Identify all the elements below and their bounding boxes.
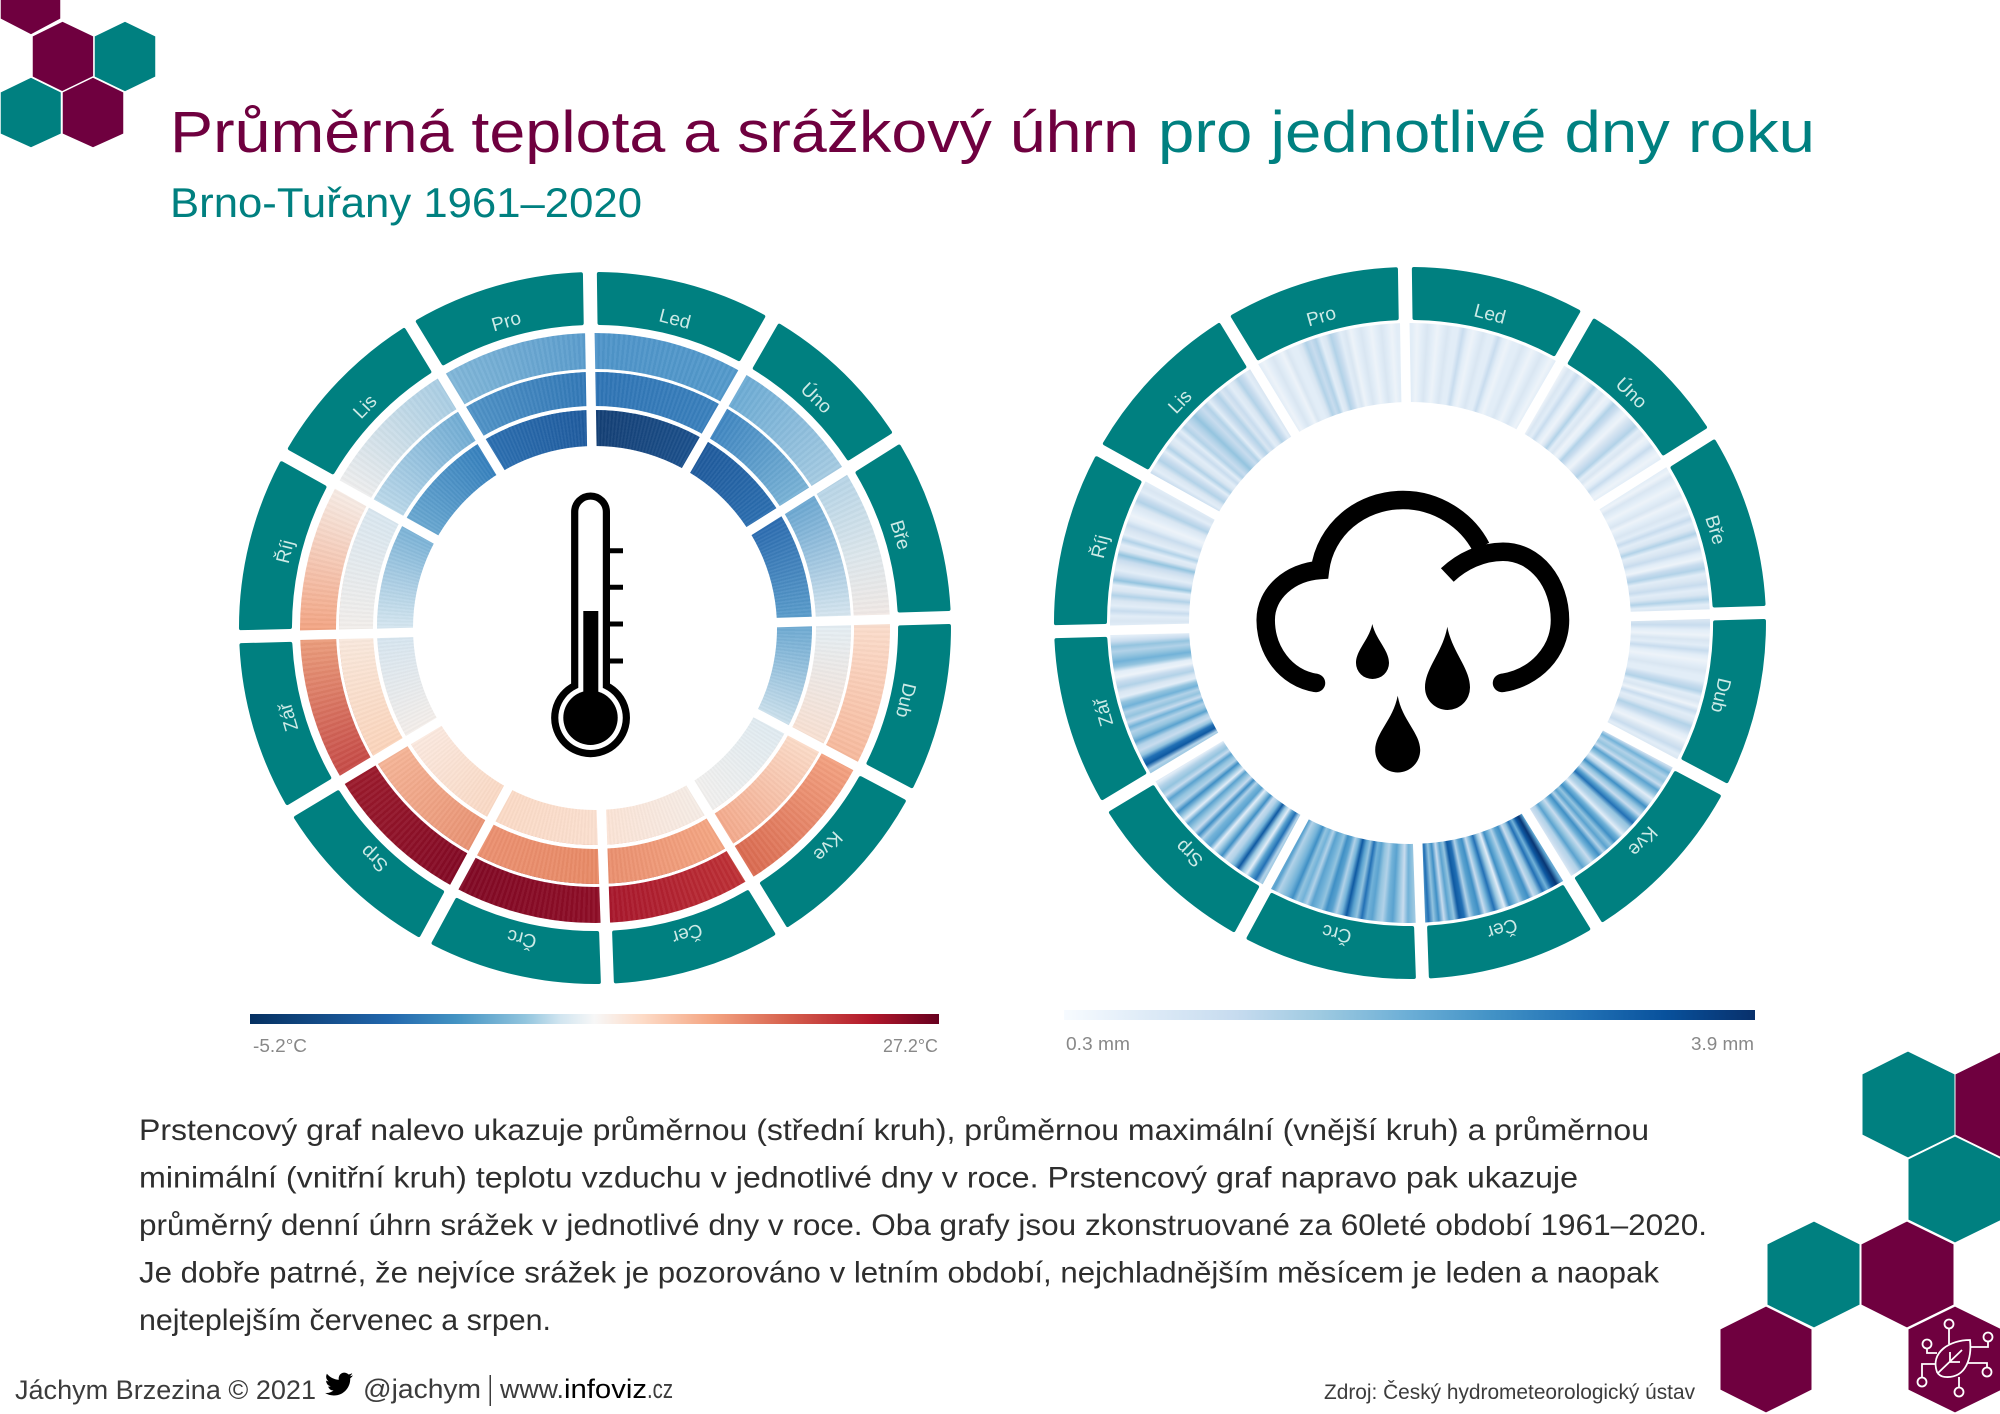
- month: Led: Led: [1471, 301, 1507, 329]
- month: Pro: Pro: [489, 307, 523, 336]
- month: Lis: [1097, 318, 1252, 476]
- body text: nejteplejším červenec a srpen.: [139, 1304, 551, 1337]
- month: Pro: [1229, 259, 1409, 362]
- body text: [139, 1114, 1707, 1337]
- month: Čer: Čer: [1483, 913, 1520, 944]
- icon: thermometer: [555, 496, 626, 754]
- month: Říj: [231, 460, 327, 639]
- author credit: www.: [499, 1374, 564, 1404]
- chart: precipitation ring chart: [1054, 267, 1766, 979]
- month: Bře: Bře: [885, 518, 914, 552]
- author credit: [15, 1374, 673, 1406]
- month: Dub: [1680, 610, 1773, 783]
- ring: daily precipitation stripes: [1110, 323, 1710, 923]
- month: Zář: Zář: [275, 699, 303, 733]
- author credit: @jachym: [363, 1374, 481, 1404]
- month: Led: Led: [656, 305, 692, 333]
- month: Pro: [415, 264, 594, 367]
- body text: Prstencový graf nalevo ukazuje průměrnou (střední kruh), průměrnou maximální (vnější kruh) a průměrnou: [139, 1114, 1649, 1147]
- month: Lis: Lis: [349, 391, 381, 423]
- icon: leaf with circuit nodes: [1918, 1320, 1992, 1396]
- month: Dub: Dub: [891, 680, 919, 719]
- ring: average minimum temperature: [377, 410, 812, 845]
- month: Bře: Bře: [1700, 513, 1729, 547]
- month: Srp: [289, 783, 451, 942]
- body text: průměrný denní úhrn srážek v jednotlivé dny v roce. Oba grafy jsou zkonstruované za 60leté období 1961–2020.: [139, 1209, 1707, 1242]
- chart: temperature ring chart: [238, 272, 951, 984]
- month: Lis: Lis: [1164, 386, 1196, 418]
- month: Kve: Kve: [808, 826, 846, 865]
- month: Srp: [1103, 778, 1266, 937]
- month: Zář: [232, 632, 332, 805]
- author credit: infoviz: [564, 1374, 647, 1404]
- month: Bře: [853, 443, 958, 622]
- hexagon cluster: top left: [0, 0, 156, 148]
- chart centre: [413, 446, 777, 810]
- month: Říj: Říj: [272, 537, 298, 565]
- month: Dub: Dub: [1706, 676, 1734, 715]
- ring: average temperature: [339, 372, 851, 884]
- temperature scale labels: -5.2°C: [253, 1036, 307, 1056]
- month: Srp: Srp: [1171, 835, 1207, 871]
- author credit: Jáchym Brzezina © 2021: [15, 1375, 316, 1405]
- author credit: .cz: [647, 1374, 673, 1404]
- hexagon cluster: bottom right: [1720, 1051, 2000, 1413]
- month: Kve: [753, 768, 911, 932]
- month: Kve: Kve: [1623, 822, 1661, 860]
- month: Čer: Čer: [668, 918, 705, 948]
- month: Čer: [602, 888, 776, 990]
- title: pro jednotlivé dny roku: [1158, 100, 1815, 165]
- month: Pro: Pro: [1304, 303, 1338, 331]
- temperature scale labels: 27.2°C: [883, 1036, 938, 1056]
- subtitle: Brno-Tuřany 1961–2020: [170, 179, 642, 226]
- temperature colour scale bar: [250, 1014, 939, 1024]
- chart centre: [1188, 402, 1630, 844]
- month: Črc: [431, 897, 609, 992]
- month: Srp: Srp: [356, 840, 392, 875]
- month: Dub: [865, 615, 958, 788]
- month: Úno: [1561, 315, 1710, 462]
- month: Črc: [1246, 892, 1424, 987]
- month separators and teal month labels: [1054, 267, 1766, 979]
- precipitation scale labels: 0.3 mm: [1066, 1034, 1130, 1054]
- title: Průměrná teplota a srážkový úhrn: [170, 100, 1139, 165]
- month: Říj: Říj: [1086, 533, 1113, 561]
- ring: average maximum temperature: [300, 333, 890, 923]
- month: Zář: [1047, 627, 1147, 801]
- temperature scale labels: [253, 1036, 938, 1056]
- month: Úno: Úno: [796, 378, 836, 418]
- month: Úno: [746, 319, 896, 466]
- body text: minimální (vnitřní kruh) teplotu vzduchu v jednotlivé dny v roce. Prstencový graf napravo pak ukazuje: [139, 1162, 1578, 1194]
- body text: Je dobře patrné, že nejvíce srážek je pozorováno v letním období, nejchladnějším měsícem je leden a naopak: [139, 1256, 1660, 1290]
- title: [170, 100, 1815, 165]
- month: Úno: Úno: [1611, 373, 1651, 413]
- precipitation colour scale bar: [1064, 1010, 1755, 1020]
- icon: twitter bird: [325, 1373, 353, 1395]
- month: Bře: [1668, 439, 1773, 618]
- month: Čer: [1417, 884, 1591, 986]
- precipitation scale labels: [1066, 1034, 1754, 1054]
- month: Říj: [1045, 456, 1142, 634]
- icon: rain cloud: [1266, 500, 1560, 773]
- month: Led: [587, 264, 766, 362]
- month: Črc: Črc: [1319, 919, 1353, 948]
- month: Kve: [1568, 764, 1726, 927]
- month: Led: [1402, 259, 1580, 357]
- month separators and teal month labels: [238, 272, 951, 984]
- source credit: Zdroj: Český hydrometeorologický ústav: [1324, 1381, 1695, 1404]
- month: Zář: Zář: [1089, 695, 1118, 728]
- precipitation scale labels: 3.9 mm: [1691, 1034, 1754, 1054]
- month: Lis: [283, 323, 438, 481]
- month: Črc: Črc: [505, 924, 538, 952]
